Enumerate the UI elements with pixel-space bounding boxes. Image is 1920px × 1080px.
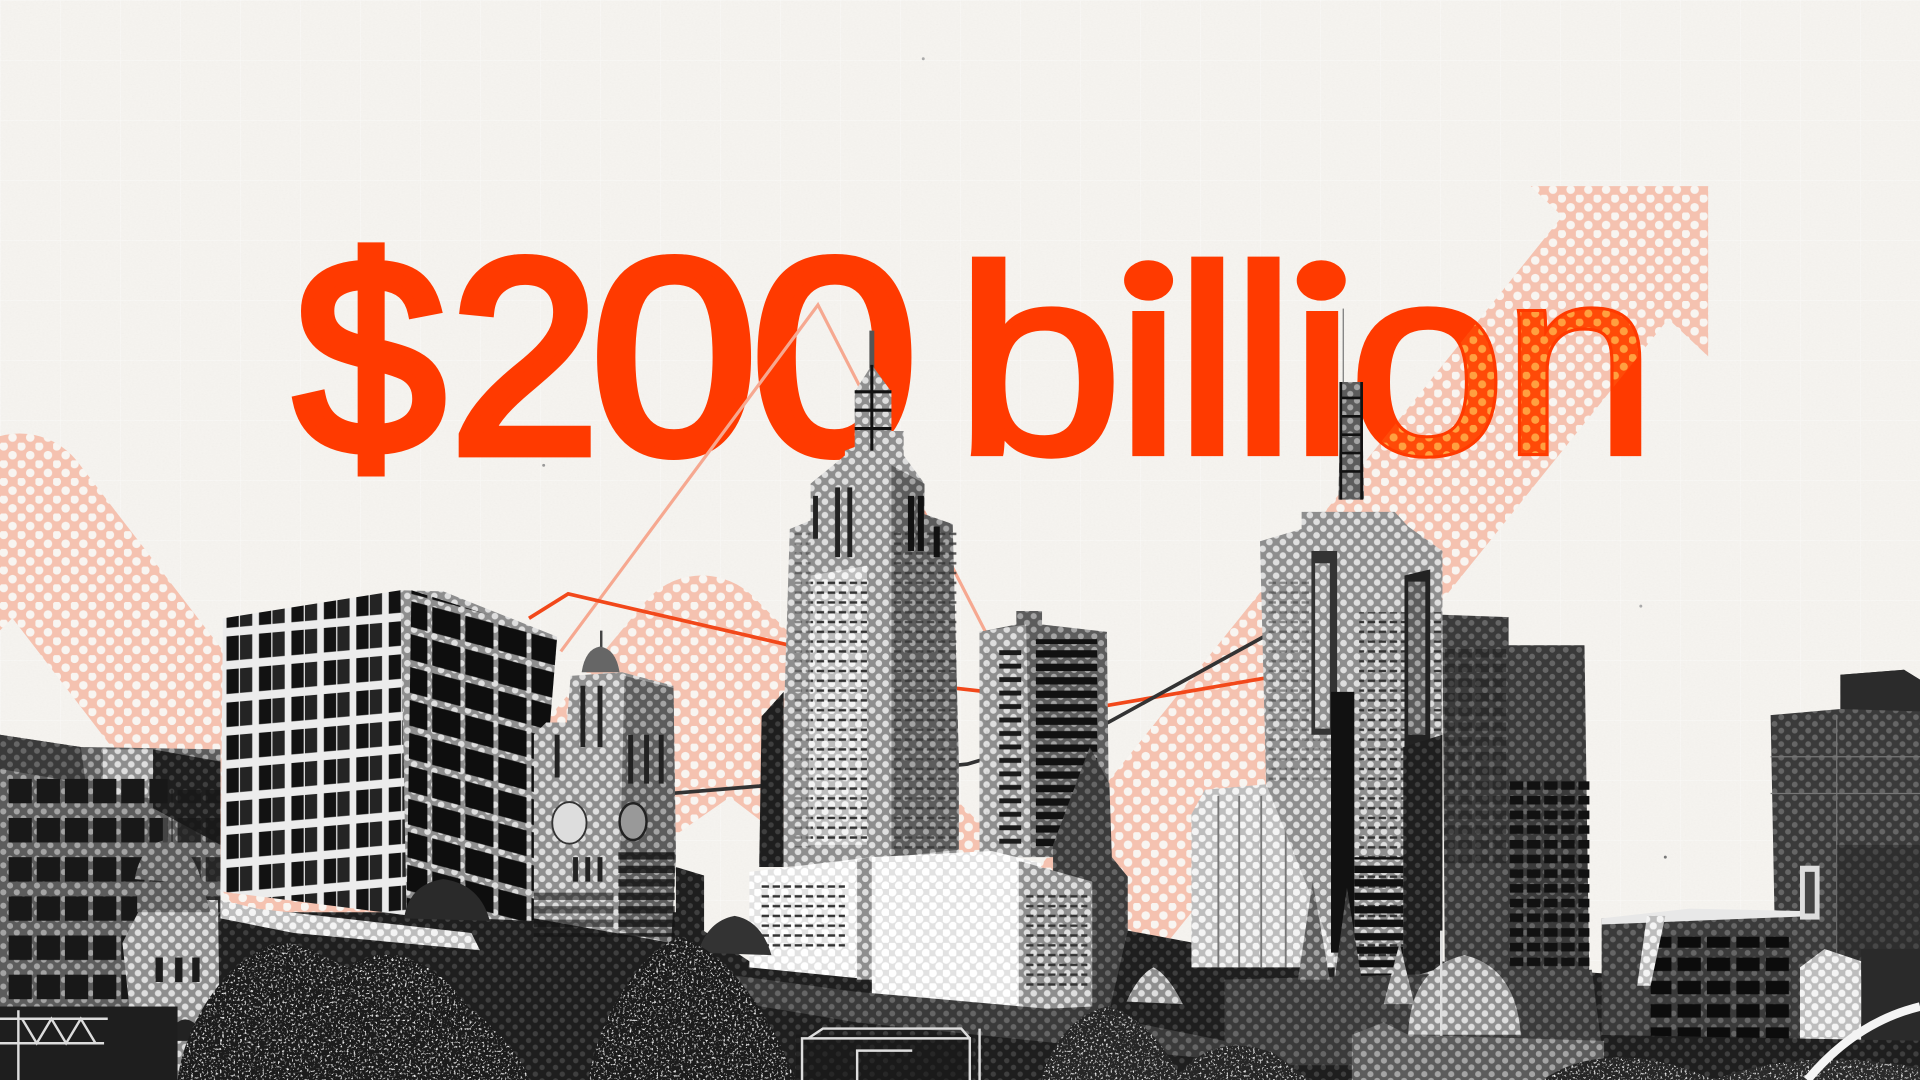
clock faces (552, 802, 647, 844)
headline: $200 billion: 0 (591, 204, 757, 511)
white bridge arc (1807, 1007, 1920, 1080)
building: twin dark towers (1442, 615, 1589, 986)
headline: $200 billion: $ (295, 204, 444, 511)
building: dark church block (1053, 747, 1128, 1016)
headline: $200 billion: l (1231, 211, 1296, 510)
foreground trees (178, 937, 1920, 1080)
building: white grid office block (220, 590, 557, 921)
building: low block right (1602, 866, 1920, 1080)
thin salmon trend line (561, 305, 994, 651)
station and rear base mass (0, 912, 1920, 1080)
headline: $200 billion: b (955, 211, 1123, 510)
headline: $200 billion: 2 (451, 204, 599, 511)
building: right skyscraper (1260, 309, 1442, 1004)
headline: $200 billion: l (1175, 211, 1239, 510)
skyline of Melbourne buildings (0, 309, 1920, 1080)
headline: $200 billion: i (1290, 211, 1354, 510)
headline: $200 billion: i (1116, 211, 1180, 510)
Flinders Street station (122, 879, 1920, 1080)
building: dark glass far right (1771, 670, 1920, 980)
building: pale cluster at foot of right tower (1191, 784, 1337, 967)
building: central art-deco tower (759, 331, 959, 867)
railway gantry (796, 1029, 980, 1080)
clock tower (534, 631, 676, 943)
station dome building (122, 818, 220, 1080)
arrow overlap on headline letters (1382, 310, 1638, 456)
headline: $200 billion: o (1349, 211, 1506, 510)
halftone zigzag growth arrow (0, 186, 1708, 1007)
building: striped tower (980, 611, 1109, 857)
building: pale low block (749, 851, 1092, 1010)
headline: $200 billion: 0 (752, 204, 917, 511)
headline: $200 billion (292, 242, 1642, 476)
building: small block beside clock tower (676, 867, 704, 949)
foreground left scaffolding (0, 1007, 178, 1080)
headline: $200 billion: n (1502, 211, 1656, 510)
dark trend line (671, 637, 1264, 793)
building: left mid-rise (0, 735, 220, 1035)
orange trend line (529, 594, 1264, 705)
